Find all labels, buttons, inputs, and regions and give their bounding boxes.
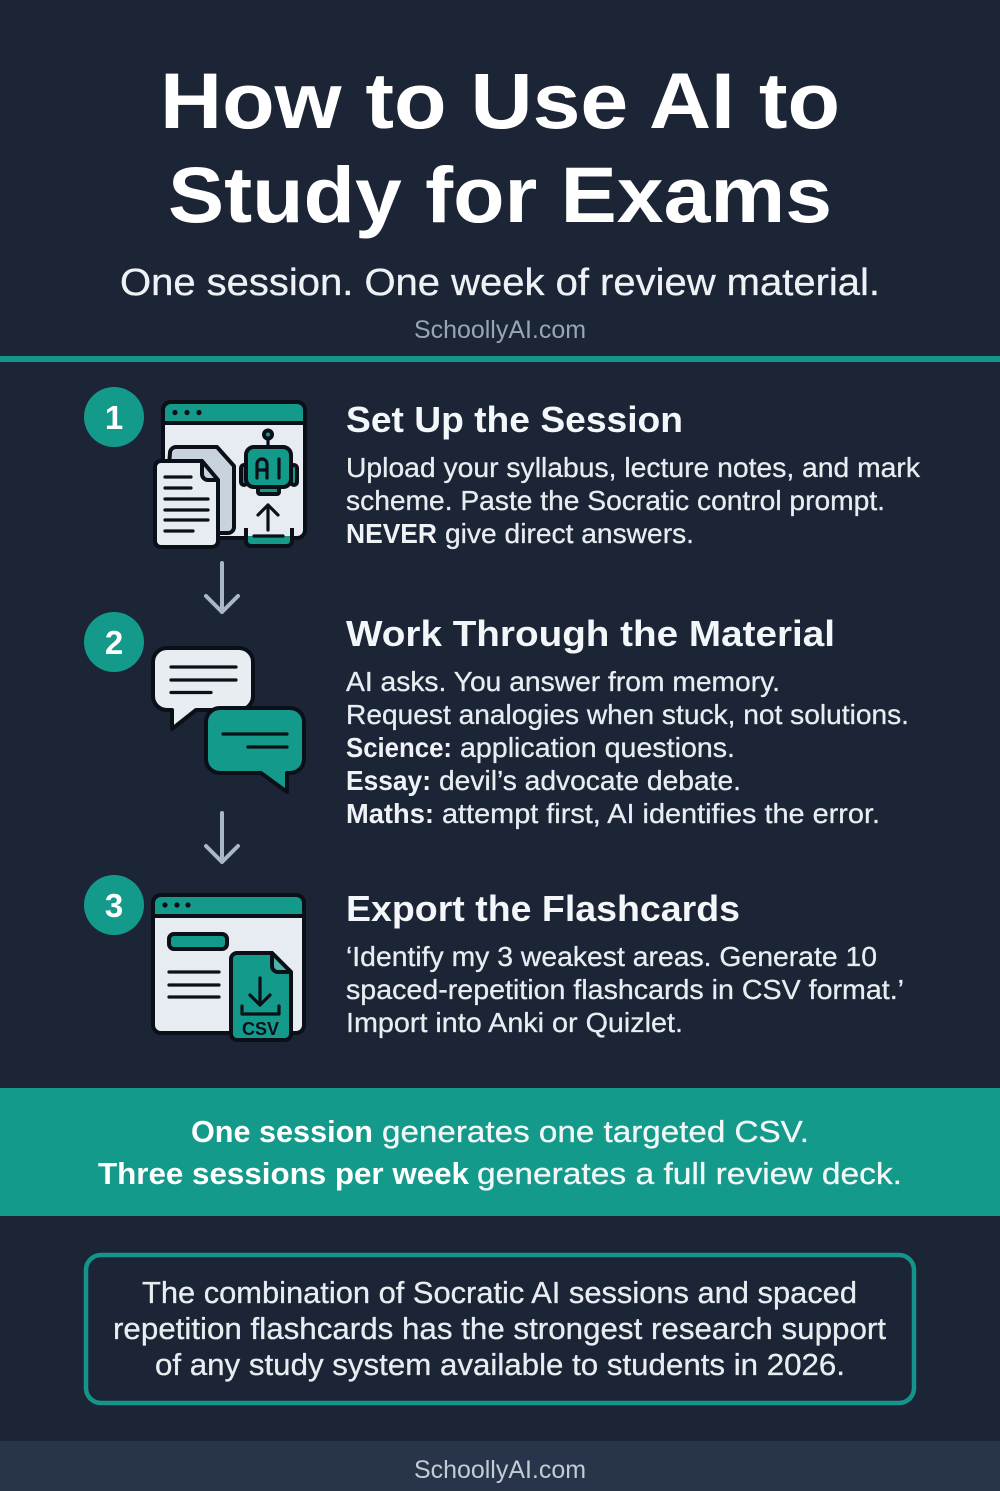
step 1 heading: Set Up the Session	[346, 399, 683, 440]
step 1 text: scheme. Paste the Socratic control prompt.	[346, 485, 885, 516]
step 2 number badge	[84, 612, 144, 672]
step 2 text: Request analogies when stuck, not solutions.	[346, 699, 909, 730]
footer	[0, 1441, 1000, 1491]
banner: teal summary: Three sessions per week	[98, 1156, 470, 1191]
icon: window with CSV download file: CSV	[242, 1019, 279, 1039]
step 2 text: Science:	[346, 732, 452, 763]
step 3 number badge: 3	[105, 887, 123, 924]
step 1 text	[346, 452, 921, 549]
banner: teal summary	[0, 1088, 1000, 1216]
title: How to Use AI to	[160, 56, 840, 145]
callout: research note: repetition flashcards has the strongest research support	[113, 1311, 886, 1346]
banner: teal summary: generates a full review deck.	[477, 1156, 902, 1191]
step 3 text	[346, 941, 904, 1038]
step 2	[84, 612, 909, 829]
step 1 text: Upload your syllabus, lecture notes, and mark	[346, 452, 921, 483]
step 3 number badge	[84, 875, 144, 935]
title: Study for Exams	[168, 150, 832, 239]
step 2 text: Essay:	[346, 765, 431, 796]
step 3 text: spaced-repetition flashcards in CSV format.’	[346, 974, 904, 1005]
step 1	[84, 387, 921, 549]
icon: window with CSV download file	[153, 895, 304, 1040]
step 2 text: attempt first, AI identifies the error.	[442, 798, 880, 829]
callout: research note: The combination of Socratic AI sessions and spaced	[142, 1275, 857, 1310]
subtitle: One session. One week of review material.	[120, 262, 880, 304]
step 2 text	[346, 666, 909, 829]
step 1 text: give direct answers.	[445, 518, 694, 549]
arrow: step 1 to 2	[206, 563, 238, 612]
step 3	[84, 875, 904, 1040]
title	[160, 56, 840, 239]
step 1 text: NEVER	[346, 518, 437, 549]
footer: SchoollyAI.com	[414, 1456, 586, 1484]
callout: research note: of any study system available to students in 2026.	[155, 1347, 845, 1382]
arrow: step 2 to 3	[206, 813, 238, 862]
icon: window with documents and AI robot upload	[155, 402, 305, 547]
site label: top: SchoollyAI.com	[414, 316, 586, 344]
step 2 text: devil’s advocate debate.	[439, 765, 741, 796]
step 1 number badge	[84, 387, 144, 447]
icon: chat bubbles	[153, 648, 304, 792]
step 2 text: Maths:	[346, 798, 434, 829]
step 1 number badge: 1	[105, 399, 123, 436]
banner: teal summary: One session	[191, 1114, 373, 1149]
step 3 text: Import into Anki or Quizlet.	[346, 1007, 683, 1038]
step 2 text: application questions.	[460, 732, 735, 763]
banner: teal summary: generates one targeted CSV.	[382, 1114, 809, 1149]
step 2 text: AI asks. You answer from memory.	[346, 666, 780, 697]
callout: research note	[86, 1255, 914, 1403]
step 2 number badge: 2	[105, 624, 123, 661]
step 3 text: ‘Identify my 3 weakest areas. Generate 10	[346, 941, 877, 972]
step 2 heading: Work Through the Material	[346, 613, 835, 654]
step 3 heading: Export the Flashcards	[346, 888, 740, 929]
